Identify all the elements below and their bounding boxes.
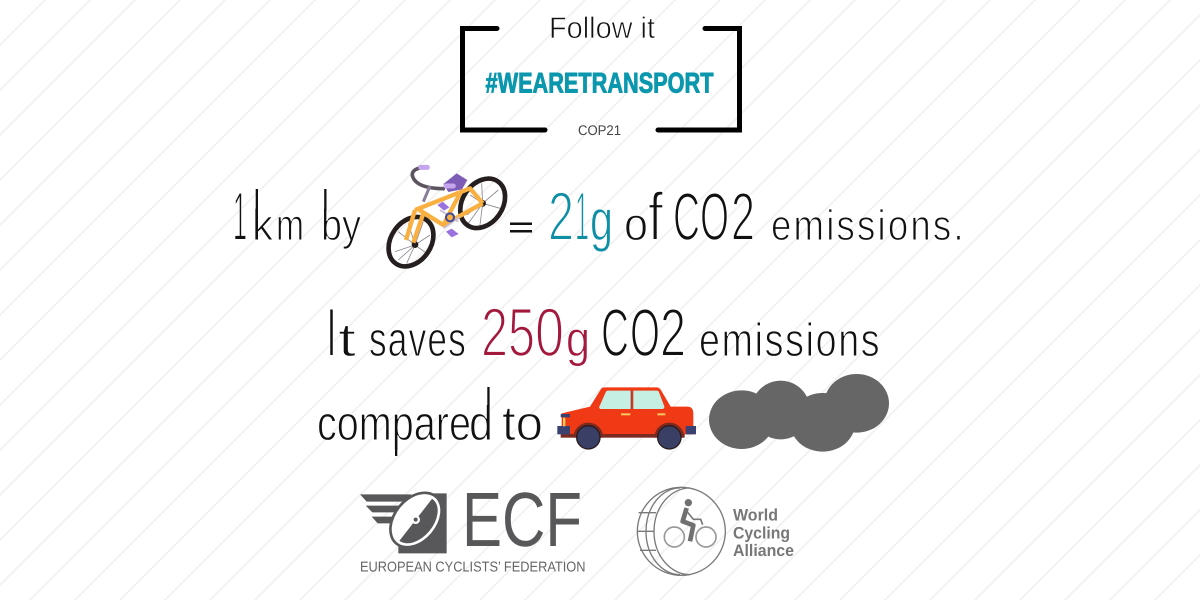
text: CO2 emissions: 2 (660, 295, 686, 371)
equals sign (510, 222, 532, 232)
statement line 2 (326, 294, 881, 371)
value: 250g (481, 294, 590, 371)
text: 1km by (233, 178, 361, 255)
value: 250g: 2 (481, 294, 508, 371)
icon: red car (557, 387, 696, 449)
text: of CO2 emissions.: f (648, 179, 663, 255)
text: of CO2 emissions.: o (624, 198, 648, 250)
text: CO2 emissions: C (601, 295, 629, 371)
text: of CO2 emissions.: emissions. (771, 202, 966, 250)
wordmark (733, 506, 794, 560)
emblem (360, 492, 447, 554)
text: 1km by: 1 (233, 178, 247, 255)
wordmark: World (733, 506, 778, 525)
text: CO2 emissions: emissions (699, 313, 881, 366)
hashtag: #WEARETRANSPORT (486, 68, 714, 100)
text: of CO2 emissions. (624, 179, 966, 255)
tagline: EUROPEAN CYCLISTS’ FEDERATION (360, 560, 586, 576)
text: compared to: to (502, 397, 543, 451)
value: 250g: g (566, 311, 590, 367)
text: compared to: d (469, 397, 493, 451)
text: CO2 emissions (601, 295, 881, 371)
text: It saves: t (338, 313, 356, 366)
logo: ECF (360, 492, 584, 572)
text: compared to (317, 387, 543, 456)
text: 1km by: k (252, 201, 274, 250)
text: 1km by: m (276, 201, 304, 250)
text: It saves: saves (369, 313, 467, 367)
wordmark: ECF (462, 477, 582, 563)
text: of CO2 emissions.: C (673, 179, 700, 255)
label: COP21: COP21 (578, 122, 621, 138)
value: 250g: 5 (508, 294, 535, 371)
icon: exhaust cloud (709, 374, 889, 452)
icon: bicycle (379, 167, 514, 275)
wordmark: Cycling (733, 523, 790, 542)
hashtag panel (462, 12, 740, 138)
text: 1km by: b (321, 201, 342, 250)
text: It saves: I (326, 294, 337, 371)
statement line 1 (233, 167, 966, 275)
text: of CO2 emissions.: O (700, 179, 729, 255)
value: 250g: 0 (535, 294, 564, 371)
logo: World Cycling Alliance (637, 487, 794, 575)
text: CO2 emissions: O (630, 295, 660, 371)
value: 21g: g (590, 188, 613, 253)
heading: follow it: Follow it (549, 12, 656, 45)
value: 21g: 1 (575, 178, 589, 255)
text: of CO2 emissions.: 2 (731, 179, 755, 255)
value: 21g (548, 178, 613, 255)
wordmark: Alliance (733, 541, 794, 560)
statement line 3 (317, 374, 889, 456)
text: It saves (326, 294, 467, 371)
text: 1km by: y (342, 201, 361, 250)
value: 21g: 2 (548, 178, 574, 255)
bracket frame (462, 28, 740, 130)
globe and cyclist emblem (637, 487, 725, 575)
text: compared to: compare (317, 397, 471, 451)
